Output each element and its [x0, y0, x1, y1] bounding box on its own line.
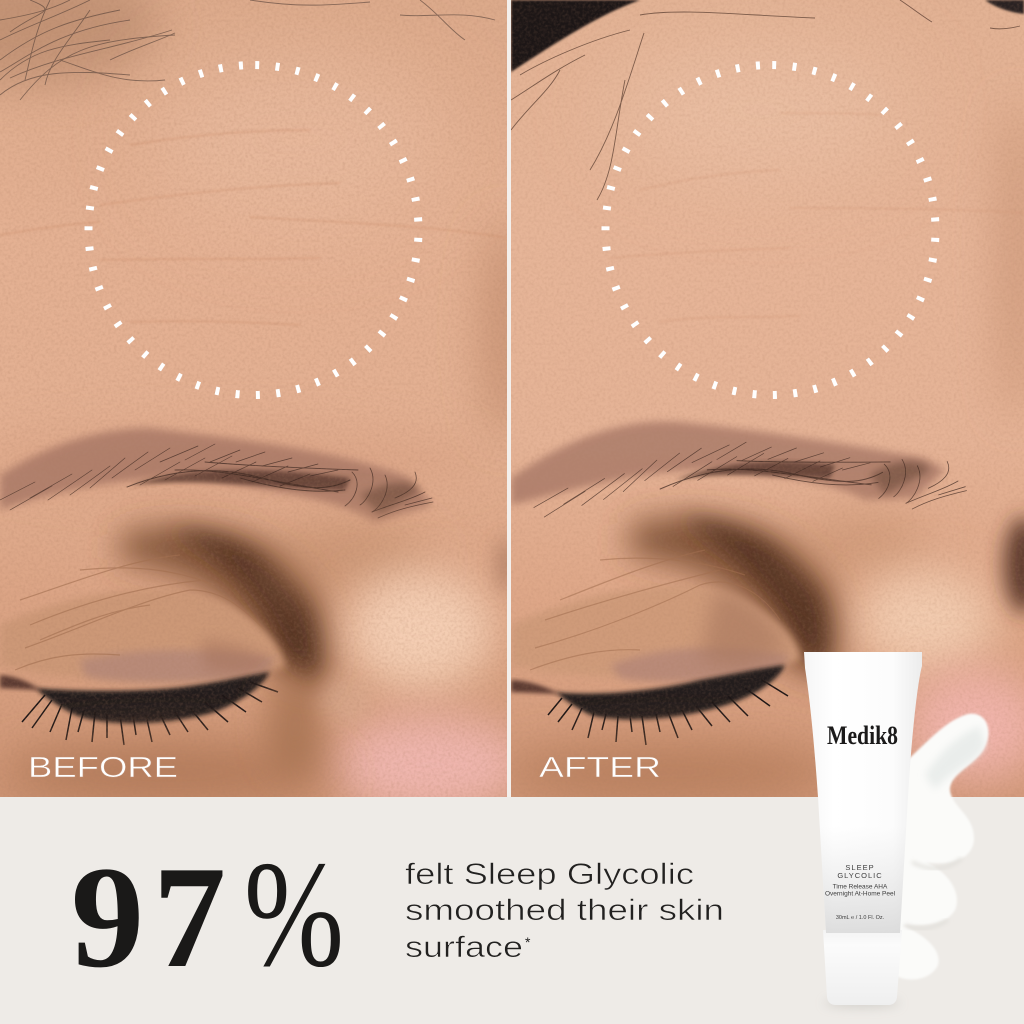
panel: after photo [500, 0, 1024, 802]
eyebrow [0, 428, 433, 522]
statistic: 97% [71, 830, 344, 998]
brand name: Medik8 [827, 721, 898, 750]
forehead wrinkles [720, 174, 721, 175]
forehead wrinkles [0, 130, 507, 325]
loose hairs [511, 0, 1020, 200]
product name and details: Overnight At-Home Peel [825, 890, 896, 898]
label: before: BEFORE [28, 752, 178, 784]
product name and details: 30mL ℮ / 1.0 Fl. Oz. [836, 915, 885, 921]
cheek highlight [855, 570, 995, 670]
eyelid [0, 555, 285, 683]
under-eye shadow [500, 742, 840, 802]
tube cap [823, 930, 902, 1005]
panel: before photo [0, 0, 530, 815]
caption text: smoothed their skin [405, 894, 724, 927]
product name and details [825, 863, 896, 921]
caption text: * [525, 934, 531, 950]
product: tube [804, 652, 922, 1008]
product: cream swatch [895, 714, 989, 979]
product name and details: Time Release AHA [833, 884, 888, 890]
tube body [804, 652, 922, 933]
caption text: felt Sleep Glycolic [405, 858, 694, 891]
dotted circle: before [87, 63, 420, 397]
caption text: surface [405, 931, 523, 964]
eyelashes [0, 672, 278, 745]
label: after: AFTER [539, 752, 661, 784]
nose shadow [1004, 517, 1024, 613]
pink nose side [905, 670, 1024, 780]
eye socket shadow [630, 517, 844, 680]
statistic: 97%: % [244, 830, 344, 998]
eyelashes [511, 665, 788, 745]
eye socket shadow [120, 526, 332, 695]
dotted circle: after [604, 63, 937, 397]
black headband [511, 0, 640, 72]
stray hairs at corner [0, 0, 495, 100]
eyelid [511, 550, 800, 682]
divider between photos [507, 0, 511, 797]
pink cheek [322, 700, 507, 797]
eyebrow [511, 422, 967, 526]
highlight on cheek bone [345, 570, 495, 690]
caption text [405, 858, 724, 964]
background: lower caption band [0, 797, 1024, 1024]
under-eye shadow [0, 742, 340, 802]
product name and details: SLEEP [845, 863, 875, 872]
statistic: 97%: 97 [71, 836, 226, 998]
product name and details: GLYCOLIC [837, 871, 883, 880]
